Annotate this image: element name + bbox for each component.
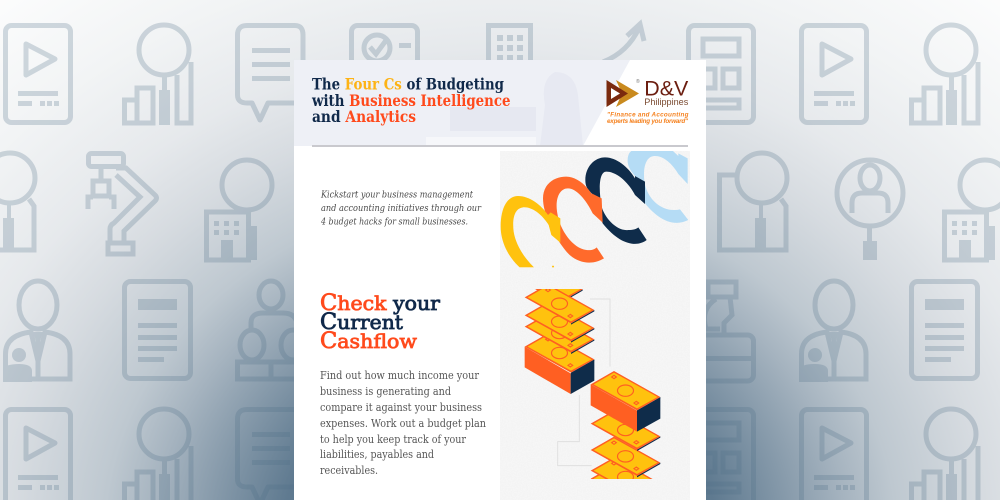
icon: person with tie bbox=[799, 281, 866, 382]
heading bbox=[320, 291, 440, 354]
illustration: stacks of money bbox=[524, 289, 660, 479]
logo: "Finance and Accounting bbox=[607, 111, 689, 118]
icon: document magnifier bbox=[0, 153, 35, 252]
icon: person with tie bbox=[3, 281, 70, 382]
icon: magnifier over bar chart bbox=[124, 409, 191, 500]
body text: business is generating and bbox=[320, 384, 452, 398]
heading: Check your bbox=[320, 291, 440, 316]
body text: compare it against your business bbox=[320, 400, 482, 414]
icon: magnifier over bar chart bbox=[912, 409, 978, 500]
arrow: navy bbox=[585, 157, 647, 244]
money block: right stack bbox=[590, 371, 660, 479]
title: with Business Intelligence bbox=[311, 91, 510, 110]
icon: building magnifier bbox=[944, 160, 1000, 260]
icon: document magnifier bbox=[720, 153, 787, 252]
arrow: yellow bbox=[501, 196, 560, 268]
body text: Find out how much income your bbox=[320, 368, 479, 382]
body text: to help you keep track of your bbox=[320, 432, 466, 446]
icon: magnifier over bar chart bbox=[912, 25, 978, 125]
logo: Philippines bbox=[644, 97, 689, 108]
title bbox=[311, 74, 510, 126]
icon: stacked hand bbox=[688, 282, 754, 381]
heading: Current bbox=[320, 310, 403, 335]
title: and Analytics bbox=[312, 107, 416, 126]
icon: logo arrows bbox=[606, 80, 639, 107]
body text: receivables. bbox=[320, 463, 378, 477]
icon: checklist bbox=[352, 26, 418, 122]
heading: Cashflow bbox=[320, 329, 417, 354]
title: The Four Cs of Budgeting bbox=[312, 74, 504, 94]
intro text: 4 budget hacks for small businesses. bbox=[320, 216, 468, 228]
icon: magnifier over bar chart bbox=[124, 25, 191, 125]
logo: experts leading you forward" bbox=[607, 118, 689, 125]
icon: speech bubble bbox=[238, 26, 303, 120]
logo: ® bbox=[636, 78, 640, 85]
icon: building magnifier bbox=[206, 160, 272, 260]
logo: D&V bbox=[644, 77, 688, 100]
logo bbox=[606, 77, 689, 125]
arrow: orange bbox=[543, 177, 604, 263]
panel: infographic page bbox=[294, 60, 706, 500]
icon: page layout bbox=[688, 26, 754, 122]
icon: page layout bbox=[688, 410, 754, 500]
body text: expenses. Work out a budget plan bbox=[320, 416, 486, 430]
panel: header banner bbox=[294, 60, 630, 146]
arrow: light blue bbox=[628, 151, 688, 223]
chart: four interlocking arrows bbox=[501, 151, 688, 268]
icon: video document bbox=[6, 410, 70, 500]
body text bbox=[320, 368, 486, 477]
icon: speech bubble bbox=[238, 410, 303, 500]
body text: liabilities, payables and bbox=[320, 447, 435, 461]
icon: office building bbox=[488, 26, 530, 122]
panel: illustration background bbox=[500, 151, 690, 500]
money block: left stack bbox=[524, 289, 594, 394]
icon: growth arrow bbox=[603, 24, 644, 62]
icon: robot arm bbox=[88, 154, 156, 254]
icon: report document bbox=[124, 282, 190, 378]
icon: report document bbox=[912, 282, 978, 378]
icon: video document bbox=[6, 26, 70, 122]
intro text: Kickstart your business management bbox=[320, 190, 473, 200]
icon: video document bbox=[802, 26, 866, 122]
icon: video document bbox=[802, 410, 866, 500]
icon: people group bbox=[238, 281, 307, 379]
intro text: and accounting initiatives through our bbox=[321, 203, 482, 214]
intro text bbox=[320, 190, 482, 228]
icon: person magnifier bbox=[837, 160, 903, 260]
